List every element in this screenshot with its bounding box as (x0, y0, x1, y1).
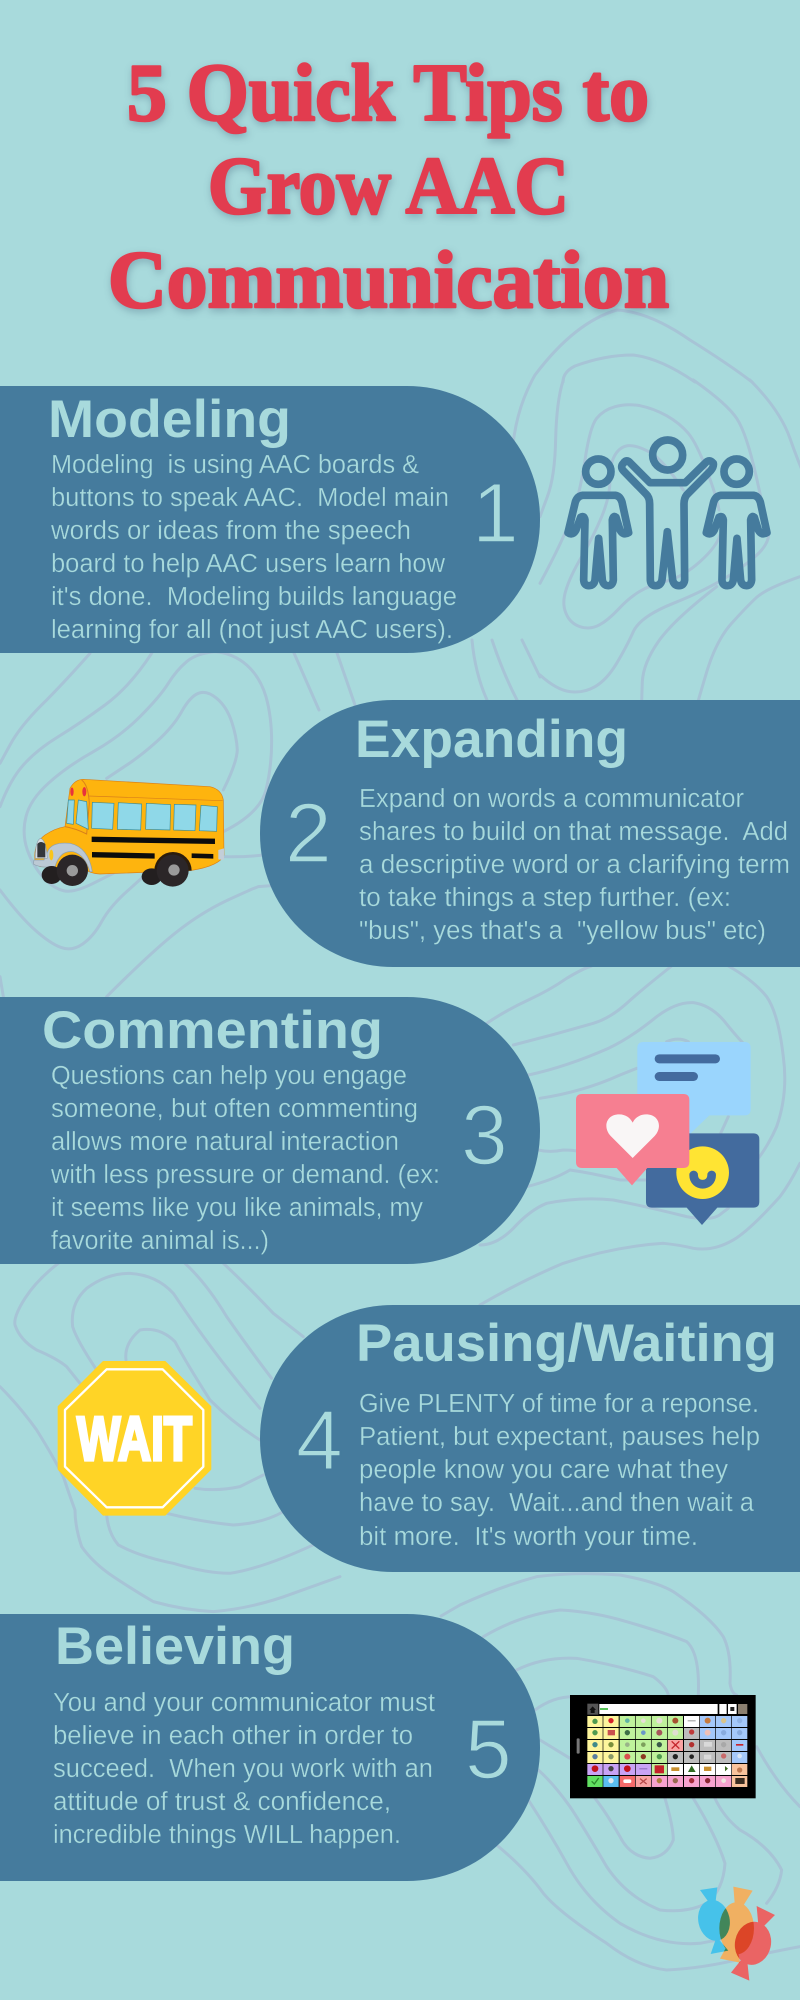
text: pausing description: bit more. It's worth your time. (359, 1523, 698, 1551)
text: modeling description: learning for all (not just AAC users). (51, 616, 453, 644)
title (108, 47, 669, 325)
heading: pausing/waiting: Pausing/Waiting (356, 1314, 777, 1373)
text: commenting description: with less pressure or demand. (ex: (50, 1161, 440, 1189)
number 2: 2 (285, 786, 332, 880)
text: believing description: attitude of trust & confidence, (53, 1788, 391, 1816)
number 3: 3 (461, 1088, 508, 1182)
panel: pausing and waiting (260, 1305, 800, 1572)
icon: AAC tablet (570, 1695, 756, 1798)
text: modeling description: words or ideas from the speech (50, 517, 411, 545)
text: commenting description (50, 1062, 440, 1255)
text: modeling description: Modeling is using AAC boards & (51, 451, 419, 479)
text: believing description: incredible things WILL happen. (53, 1821, 401, 1849)
icon: candy logo (694, 1887, 775, 1981)
text: commenting description: favorite animal is...) (51, 1227, 269, 1255)
text: pausing description: Patient, but expectant, pauses help (359, 1423, 760, 1451)
panel: modeling (0, 386, 540, 653)
text: commenting description: Questions can help you engage (51, 1062, 407, 1090)
text: expanding description: a descriptive word or a clarifying term (359, 851, 790, 879)
text: believing description: believe in each other in order to (53, 1722, 413, 1750)
title: Grow AAC (208, 140, 569, 231)
heading: believing: Believing (55, 1617, 295, 1676)
title: 5 Quick Tips to (127, 47, 649, 138)
title: Communication (108, 234, 669, 325)
heading: commenting: Commenting (42, 1001, 383, 1060)
text: expanding description: shares to build on that message. Add (359, 818, 788, 846)
text: commenting description: allows more natural interaction (51, 1128, 399, 1156)
text: believing description: succeed. When you work with an (53, 1755, 433, 1783)
text: expanding description (359, 785, 790, 945)
heading: expanding: Expanding (355, 710, 628, 769)
text: modeling description: board to help AAC users learn how (51, 550, 446, 578)
text: expanding description: Expand on words a communicator (359, 785, 745, 813)
icon: three people (568, 440, 767, 586)
text: modeling description: it's done. Modeling builds language (51, 583, 457, 611)
text: pausing description (359, 1390, 760, 1551)
text: believing description: You and your communicator must (53, 1689, 435, 1717)
text: expanding description: "bus", yes that's a "yellow bus" etc) (359, 917, 766, 945)
text: pausing description: people know you care what they (359, 1456, 728, 1484)
number 5: 5 (465, 1702, 512, 1796)
number 1: 1 (472, 466, 519, 560)
icon: chat bubbles (576, 1042, 759, 1225)
text: commenting description: someone, but often commenting (51, 1095, 418, 1123)
text: commenting description: it seems like you like animals, my (51, 1194, 423, 1222)
panel: expanding (260, 700, 800, 967)
heading: modeling: Modeling (48, 390, 291, 449)
panel: commenting (0, 997, 540, 1264)
text: believing description (53, 1689, 435, 1849)
icon: wait sign: WAIT (77, 1405, 192, 1474)
number 4: 4 (296, 1393, 343, 1487)
icon: school bus (33, 779, 224, 887)
text: pausing description: have to say. Wait...and then wait a (359, 1489, 755, 1517)
text: expanding description: to take things a step further. (ex: (359, 884, 731, 912)
text: modeling description: buttons to speak AAC. Model main (51, 484, 449, 512)
text: modeling description (50, 451, 457, 644)
icon: wait sign (58, 1362, 211, 1515)
text: pausing description: Give PLENTY of time for a reponse. (359, 1390, 759, 1418)
panel: believing (0, 1614, 540, 1881)
